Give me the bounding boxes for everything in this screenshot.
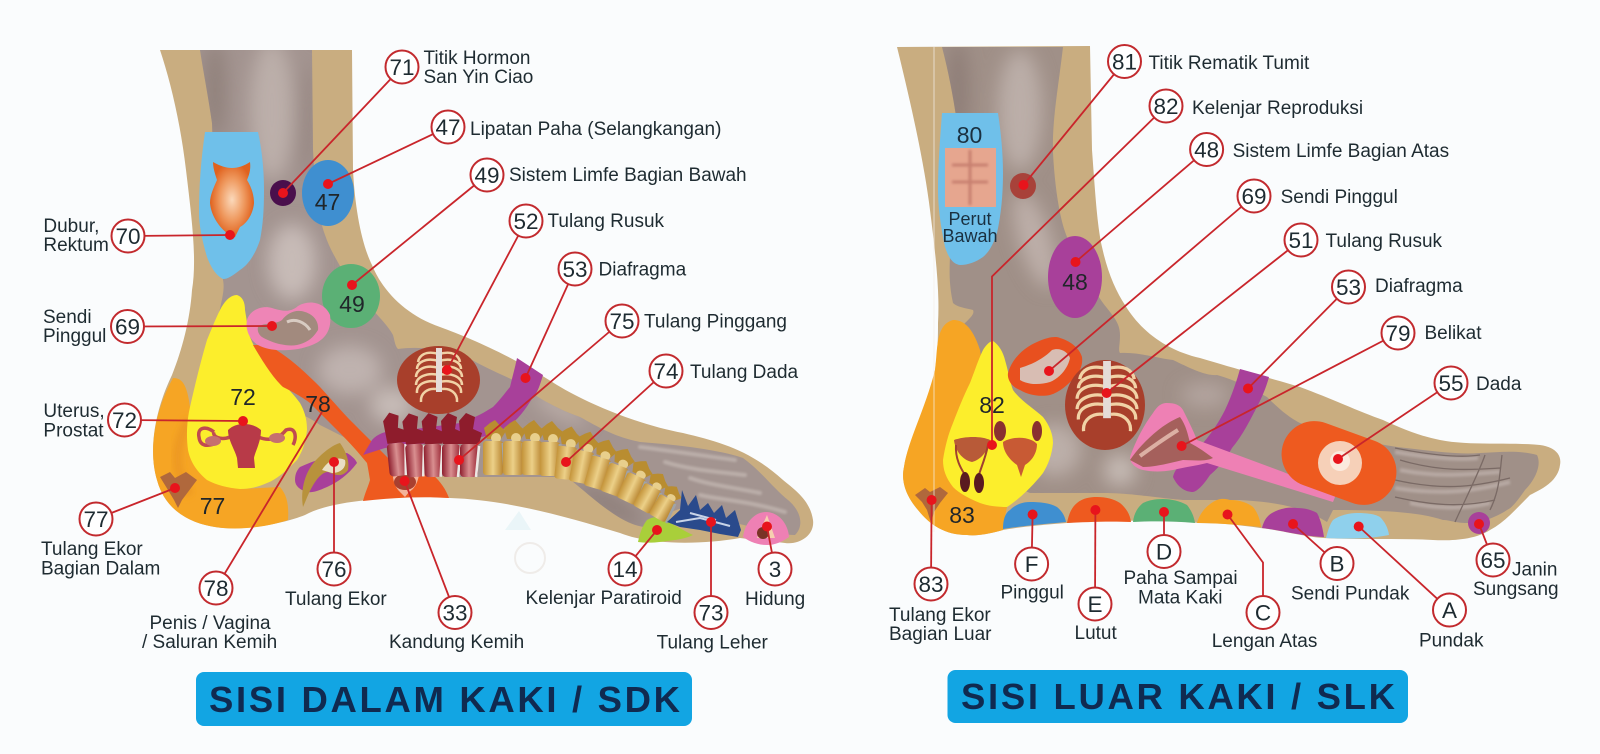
callout 70: 70 bbox=[115, 224, 141, 249]
callout F: Pinggul bbox=[1000, 583, 1064, 604]
zone 78 orange band: 78 bbox=[305, 391, 331, 417]
zone 80: 80 bbox=[957, 122, 982, 148]
callout 69: Sendi Pinggul bbox=[1281, 187, 1398, 208]
zone 3 bbox=[743, 512, 789, 545]
callout 3: Hidung bbox=[745, 589, 805, 610]
zone 48 bbox=[1048, 236, 1102, 318]
left toes bbox=[640, 447, 785, 512]
zone 77 amber heel bbox=[153, 378, 288, 529]
callout 14: Kelenjar Paratiroid bbox=[526, 588, 682, 609]
callout 65: Janin bbox=[1512, 560, 1557, 581]
callout 82: Kelenjar Reproduksi bbox=[1192, 98, 1363, 119]
callout B bbox=[1288, 519, 1410, 605]
callout 83 bbox=[889, 495, 992, 645]
callout D: Mata Kaki bbox=[1138, 588, 1222, 608]
zone 80: Bawah bbox=[942, 226, 998, 246]
callout 65 bbox=[1473, 519, 1559, 600]
callout 49: 49 bbox=[474, 163, 500, 188]
callout 74 bbox=[561, 354, 799, 467]
callout C: Lengan Atas bbox=[1212, 631, 1317, 652]
callout 79: Belikat bbox=[1424, 323, 1482, 344]
callout 51: Tulang Rusuk bbox=[1326, 231, 1443, 252]
left foot outline bbox=[153, 50, 813, 543]
zone 55 orange with breast bbox=[1272, 412, 1406, 514]
callout 77: Bagian Dalam bbox=[41, 558, 160, 580]
callout C bbox=[1212, 510, 1317, 652]
callout 53 bbox=[1243, 270, 1463, 394]
right foot outline bbox=[897, 46, 1560, 540]
callout 71 bbox=[278, 48, 533, 198]
callout 72: 72 bbox=[112, 408, 137, 433]
callout 47 bbox=[323, 110, 721, 189]
callout 81: 81 bbox=[1112, 50, 1137, 74]
callout 77 bbox=[41, 483, 180, 580]
label inside zone 72: 72 bbox=[230, 384, 256, 410]
left foot bones bbox=[200, 50, 800, 535]
callout 53: 53 bbox=[1336, 275, 1361, 300]
zone 65 bbox=[1468, 512, 1490, 534]
callout 75: 75 bbox=[609, 309, 635, 334]
callout 78: / Saluran Kemih bbox=[142, 632, 277, 653]
zone 82 yellow: 82 bbox=[979, 392, 1005, 418]
callout 49 bbox=[347, 158, 747, 290]
callout 73 bbox=[657, 517, 769, 654]
callout 47: Lipatan Paha (Selangkangan) bbox=[470, 119, 721, 140]
callout 51: 51 bbox=[1288, 228, 1314, 253]
callout 77: Tulang Ekor bbox=[41, 539, 143, 560]
callout 33 bbox=[389, 476, 524, 653]
callout 14 bbox=[526, 525, 682, 609]
right foot bone shading bbox=[948, 40, 1229, 486]
zone 49 bbox=[322, 264, 380, 328]
callout 47: 47 bbox=[435, 115, 461, 140]
callout 75: Tulang Pinggang bbox=[644, 312, 787, 332]
zone 14 bbox=[638, 517, 693, 543]
callout 75 bbox=[454, 304, 787, 465]
callout 83: 83 bbox=[918, 572, 944, 597]
callout 48 bbox=[1070, 133, 1449, 267]
callout 72 bbox=[43, 401, 248, 442]
zone 80: Perut bbox=[948, 209, 992, 229]
callout 79: 79 bbox=[1385, 321, 1411, 346]
cervical vertebrae bbox=[667, 490, 741, 537]
callout E: Lutut bbox=[1074, 623, 1117, 644]
callout 78: Penis / Vagina bbox=[150, 613, 271, 634]
lumbar vertebrae bbox=[382, 411, 482, 478]
callout 72: Uterus, bbox=[43, 401, 105, 422]
callout 70 bbox=[43, 216, 235, 256]
zone F bbox=[1003, 502, 1066, 529]
zone D bbox=[1133, 499, 1195, 523]
callout 69: 69 bbox=[1241, 184, 1267, 209]
faint print-through mark bbox=[505, 511, 545, 573]
callout D: Paha Sampai bbox=[1124, 568, 1238, 589]
zone 47 bbox=[302, 160, 354, 226]
title: sisi dalam kaki: SISI DALAM KAKI / SDK bbox=[209, 679, 681, 720]
callout 83: Bagian Luar bbox=[889, 624, 992, 645]
callout 71: 71 bbox=[389, 55, 415, 80]
callout 77: 77 bbox=[83, 507, 109, 532]
callout 53: Diafragma bbox=[1375, 276, 1463, 297]
callout A: Pundak bbox=[1419, 631, 1484, 652]
zone 76 tailbone bbox=[295, 443, 357, 507]
callout 49: Sistem Limfe Bagian Bawah bbox=[509, 165, 747, 186]
title: sisi luar kaki: SISI LUAR KAKI / SLK bbox=[961, 676, 1396, 717]
callout 81 bbox=[1018, 45, 1310, 190]
coccyx 83 bbox=[915, 487, 948, 523]
callout 69: Sendi bbox=[43, 307, 92, 328]
zone 78 orange band bbox=[253, 345, 449, 501]
zone 80 bbox=[938, 113, 1003, 265]
right foot bones bbox=[942, 47, 1539, 523]
callout B: Sendi Pundak bbox=[1291, 584, 1410, 605]
label inside zone 77: 77 bbox=[200, 493, 225, 519]
callout 3: 3 bbox=[769, 557, 781, 582]
zone 72 yellow bbox=[187, 295, 307, 489]
zone 69 pink bbox=[247, 303, 330, 350]
zone 51 rib oval bbox=[1065, 360, 1145, 450]
callout 48: 48 bbox=[1194, 138, 1219, 162]
zone 33 bladder bbox=[393, 467, 420, 497]
callout 81: Titik Rematik Tumit bbox=[1148, 53, 1310, 74]
callout E: E bbox=[1087, 592, 1103, 617]
callout 69 bbox=[43, 307, 277, 347]
zone E bbox=[1067, 497, 1131, 523]
callout 72: Prostat bbox=[43, 420, 104, 442]
callout B: B bbox=[1329, 552, 1345, 576]
callout 83: Tulang Ekor bbox=[889, 605, 991, 626]
left foot bone shading bbox=[205, 40, 648, 533]
callout 14: 14 bbox=[612, 557, 638, 582]
callout 78 bbox=[142, 412, 322, 653]
coccyx 77 bbox=[160, 472, 197, 508]
thoracic vertebrae bbox=[483, 420, 685, 524]
zone 81 bbox=[1010, 173, 1036, 199]
zone 83 amber heel bbox=[903, 320, 1007, 535]
zone 70 bbox=[199, 132, 264, 279]
callout 55: Dada bbox=[1476, 374, 1522, 395]
callout 76: 76 bbox=[321, 557, 347, 582]
callout 3 bbox=[745, 522, 805, 610]
callout 69 bbox=[1044, 180, 1398, 376]
label inside zone 83: 83 bbox=[949, 502, 975, 528]
callout 33: Kandung Kemih bbox=[389, 632, 524, 653]
callout A bbox=[1354, 522, 1484, 652]
callout 70: Rektum bbox=[43, 235, 109, 256]
callout 71: San Yin Ciao bbox=[424, 67, 533, 88]
callout 52: 52 bbox=[513, 209, 539, 234]
callout D bbox=[1124, 507, 1238, 608]
reproductive organs bbox=[954, 421, 1042, 493]
callout 51 bbox=[1102, 224, 1443, 398]
callout 74: 74 bbox=[653, 359, 679, 384]
zone 79 pink with shoulder blade bbox=[1130, 403, 1337, 502]
callout C: C bbox=[1255, 600, 1271, 626]
zone A bbox=[1326, 513, 1389, 539]
callout 48: Sistem Limfe Bagian Atas bbox=[1233, 141, 1449, 162]
zone 69 orange bbox=[1008, 337, 1082, 396]
callout 69: Pinggul bbox=[43, 326, 106, 347]
callout 33: 33 bbox=[442, 600, 468, 626]
callout A: A bbox=[1442, 598, 1457, 623]
callout 52 bbox=[442, 204, 665, 375]
uterus 72 bbox=[199, 424, 295, 468]
callout 55: 55 bbox=[1438, 371, 1464, 396]
callout 53: 53 bbox=[562, 257, 588, 282]
zone B bbox=[1262, 508, 1324, 537]
zone 49: 49 bbox=[339, 291, 365, 317]
callout 65: 65 bbox=[1480, 548, 1506, 573]
callout 70: Dubur, bbox=[43, 216, 99, 237]
callout 53: Diafragma bbox=[598, 260, 687, 280]
callout 79 bbox=[1177, 316, 1482, 451]
callout 73: 73 bbox=[698, 600, 724, 626]
callout 55 bbox=[1333, 366, 1522, 464]
callout 71: Titik Hormon bbox=[424, 48, 530, 69]
callout D: D bbox=[1156, 540, 1172, 564]
zone C bbox=[1197, 499, 1261, 527]
callout F: F bbox=[1025, 552, 1038, 577]
callout 82: 82 bbox=[1153, 94, 1179, 119]
right toes bbox=[1395, 448, 1510, 522]
callout F bbox=[1000, 510, 1064, 604]
zone 53 purple band bbox=[363, 358, 543, 455]
callout 73: Tulang Leher bbox=[657, 633, 769, 654]
zone 47: 47 bbox=[315, 189, 340, 215]
callout 65: Sungsang bbox=[1473, 579, 1559, 600]
callout E bbox=[1074, 505, 1117, 644]
callout 53 bbox=[520, 252, 687, 383]
zone 53 purple band bbox=[1173, 369, 1269, 492]
callout 82 bbox=[987, 90, 1363, 450]
zone 52 rib circle bbox=[397, 346, 480, 414]
callout 74: Tulang Dada bbox=[690, 362, 799, 383]
zone 71 bbox=[270, 180, 296, 206]
callout 52: Tulang Rusuk bbox=[548, 211, 665, 232]
zone 48: 48 bbox=[1062, 269, 1088, 295]
callout 76 bbox=[285, 457, 387, 610]
callout 78: 78 bbox=[203, 576, 229, 601]
callout 69: 69 bbox=[115, 314, 140, 340]
right foot illustration bbox=[897, 40, 1560, 540]
callout 76: Tulang Ekor bbox=[285, 589, 387, 610]
paper fold line bbox=[933, 46, 935, 532]
left foot illustration bbox=[153, 40, 813, 545]
zone 82 yellow bbox=[943, 341, 1053, 507]
